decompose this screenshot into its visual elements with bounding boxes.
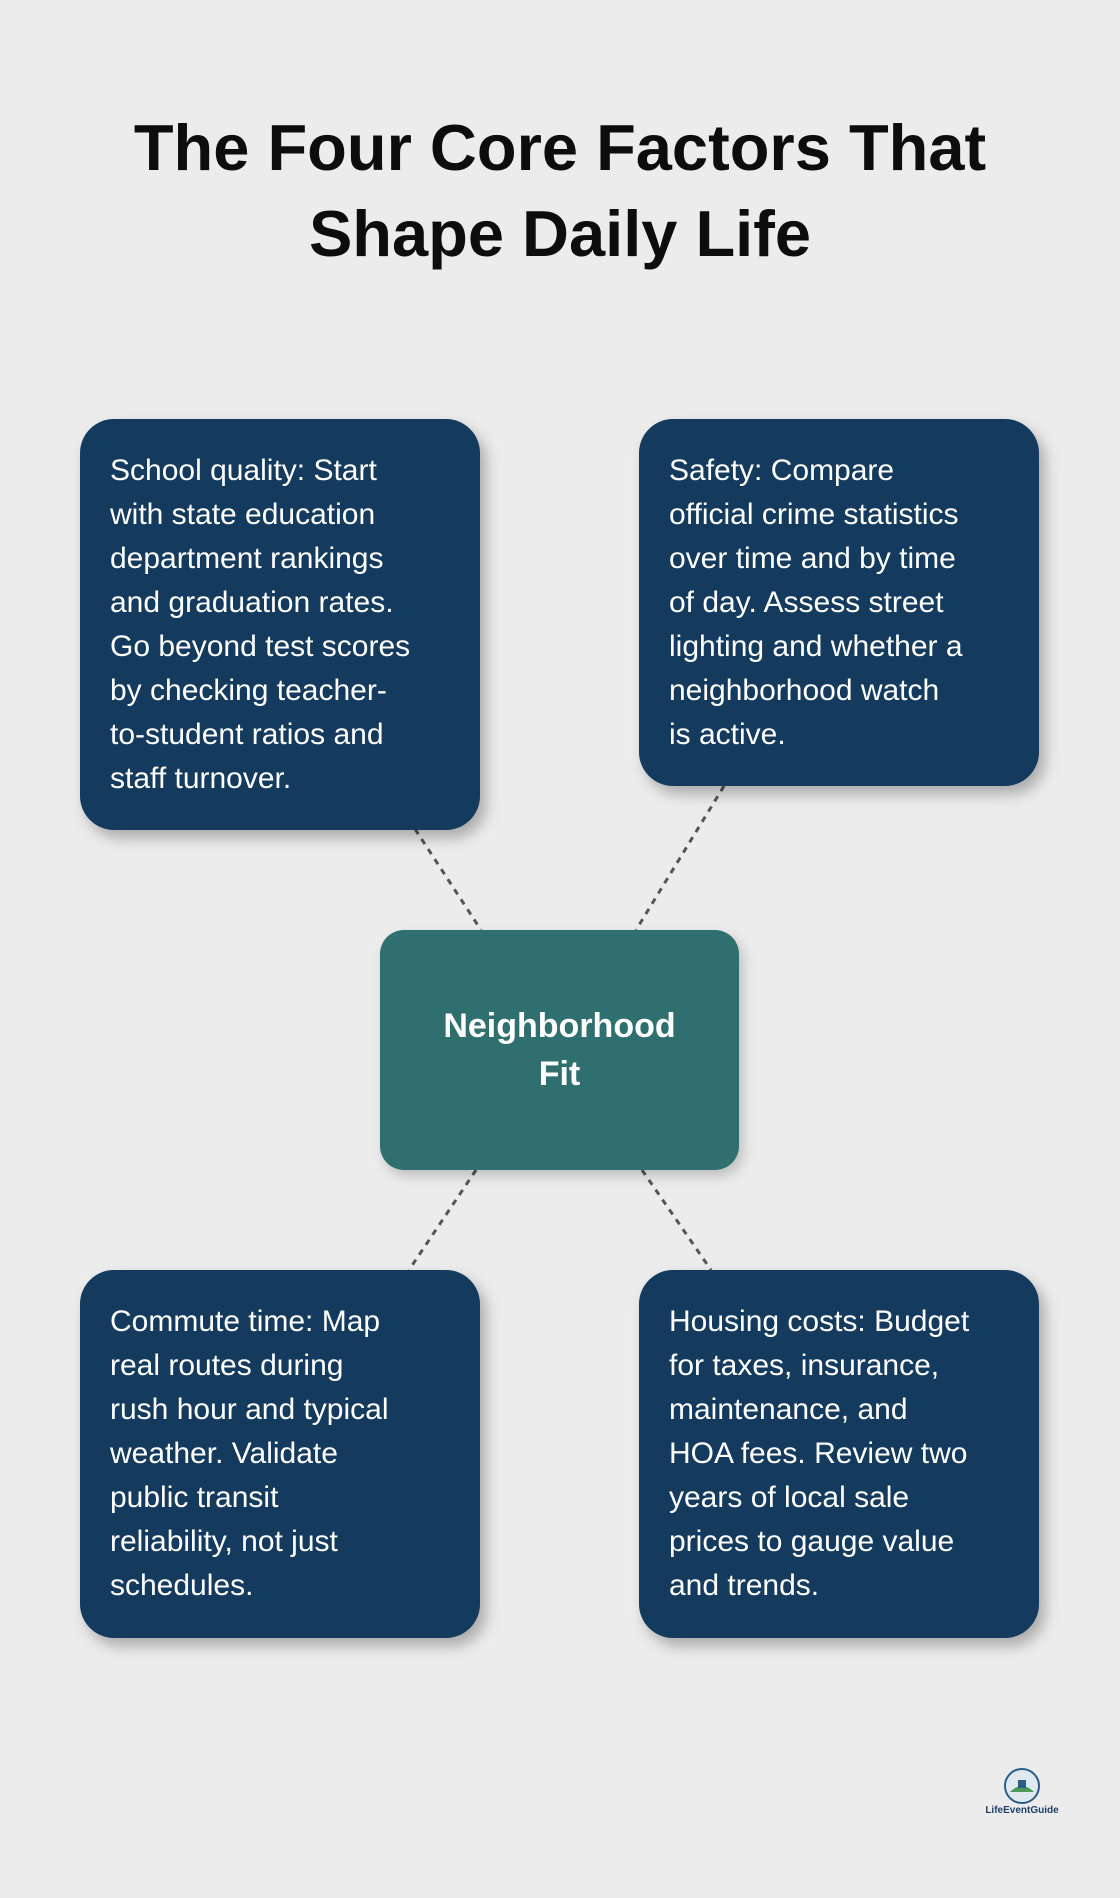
panel: school quality: department rankings bbox=[110, 542, 384, 575]
panel: housing costs: years of local sale bbox=[669, 1481, 909, 1514]
title: Shape Daily Life bbox=[309, 197, 811, 270]
panel: school quality: and graduation rates. bbox=[110, 586, 394, 619]
panel: safety: is active. bbox=[669, 718, 786, 751]
panel: school quality: with state education bbox=[110, 498, 375, 531]
panel: housing costs: maintenance, and bbox=[669, 1393, 908, 1426]
center node: Neighborhood bbox=[443, 1007, 676, 1045]
panel: school quality: Go beyond test scores bbox=[110, 630, 410, 663]
panel: commute time: Commute time: Map bbox=[110, 1305, 380, 1338]
panel: school quality: staff turnover. bbox=[110, 762, 291, 795]
center node: Fit bbox=[539, 1055, 580, 1093]
logo bbox=[985, 1768, 1059, 1816]
panel: safety: of day. Assess street bbox=[669, 586, 944, 619]
panel: school quality: to-student ratios and bbox=[110, 718, 384, 751]
panel: housing costs: Housing costs: Budget bbox=[669, 1305, 969, 1338]
panel: safety: official crime statistics bbox=[669, 498, 959, 531]
panel: commute time: reliability, not just bbox=[110, 1525, 338, 1558]
panel: school quality bbox=[80, 419, 480, 830]
panel: safety: over time and by time bbox=[669, 542, 956, 575]
panel: safety bbox=[639, 419, 1039, 786]
title bbox=[134, 111, 986, 270]
logo: LifeEventGuide bbox=[985, 1805, 1059, 1816]
panel: safety: neighborhood watch bbox=[669, 674, 939, 707]
panel: commute time: real routes during bbox=[110, 1349, 343, 1382]
panel: school quality: by checking teacher- bbox=[110, 674, 387, 707]
panel: commute time: schedules. bbox=[110, 1569, 253, 1602]
center node bbox=[380, 930, 739, 1170]
title: The Four Core Factors That bbox=[134, 111, 986, 184]
panel: housing costs: HOA fees. Review two bbox=[669, 1437, 967, 1470]
panel: commute time bbox=[80, 1270, 480, 1638]
panel: safety: lighting and whether a bbox=[669, 630, 963, 663]
panel: housing costs: for taxes, insurance, bbox=[669, 1349, 939, 1382]
panel: commute time: weather. Validate bbox=[110, 1437, 338, 1470]
panel: housing costs: prices to gauge value bbox=[669, 1525, 954, 1558]
panel: safety: Safety: Compare bbox=[669, 454, 894, 487]
panel: school quality: School quality: Start bbox=[110, 454, 377, 487]
panel: commute time: public transit bbox=[110, 1481, 278, 1514]
panel: commute time: rush hour and typical bbox=[110, 1393, 388, 1426]
panel: housing costs: and trends. bbox=[669, 1569, 819, 1602]
panel: housing costs bbox=[639, 1270, 1039, 1638]
